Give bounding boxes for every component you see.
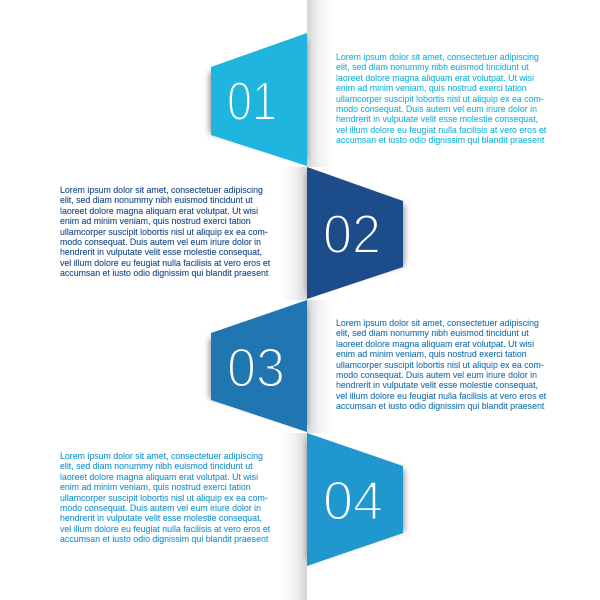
number 01: 01	[227, 70, 277, 132]
shape: step 03 banner	[209, 300, 307, 432]
shape: step 01 banner	[209, 33, 307, 166]
number 04: 04	[323, 470, 383, 532]
number 02: 02	[323, 203, 381, 265]
shape: step 02 banner	[307, 167, 405, 299]
text block 4: Lorem ipsum dolor sit amet, consectetuer adipiscing elit, sed diam nonummy nibh euismod tincidunt ut laoreet dolore magna aliquam erat volutpat. Ut wisi enim ad minim veniam, quis nostrud exerci tation ullamcorper suscipit lobortis nisl ut aliquip ex ea com- modo consequat. Duis autem vel eum iriure dolor in hendrerit in vulputate velit esse molestie consequat, vel illum dolore eu feugiat nulla facilisis at vero eros et accumsan et iusto odio dignissim qui blandit praesent	[60, 451, 270, 544]
text block 3: Lorem ipsum dolor sit amet, consectetuer adipiscing elit, sed diam nonummy nibh euismod tincidunt ut laoreet dolore magna aliquam erat volutpat. Ut wisi enim ad minim veniam, quis nostrud exerci tation ullamcorper suscipit lobortis nisl ut aliquip ex ea com- modo consequat. Duis autem vel eum iriure dolor in hendrerit in vulputate velit esse molestie consequat, vel illum dolore eu feugiat nulla facilisis at vero eros et accumsan et iusto odio dignissim qui blandit praesent	[336, 318, 546, 411]
number 03: 03	[227, 336, 285, 398]
text block 1: Lorem ipsum dolor sit amet, consectetuer adipiscing elit, sed diam nonummy nibh euismod tincidunt ut laoreet dolore magna aliquam erat volutpat. Ut wisi enim ad minim veniam, quis nostrud exerci tation ullamcorper suscipit lobortis nisl ut aliquip ex ea com- modo consequat. Duis autem vel eum iriure dolor in hendrerit in vulputate velit esse molestie consequat, vel illum dolore eu feugiat nulla facilisis at vero eros et accumsan et iusto odio dignissim qui blandit praesent	[336, 52, 546, 145]
text block 2: Lorem ipsum dolor sit amet, consectetuer adipiscing elit, sed diam nonummy nibh euismod tincidunt ut laoreet dolore magna aliquam erat volutpat. Ut wisi enim ad minim veniam, quis nostrud exerci tation ullamcorper suscipit lobortis nisl ut aliquip ex ea com- modo consequat. Duis autem vel eum iriure dolor in hendrerit in vulputate velit esse molestie consequat, vel illum dolore eu feugiat nulla facilisis at vero eros et accumsan et iusto odio dignissim qui blandit praesent	[60, 185, 270, 278]
shape: step 04 banner	[307, 433, 405, 566]
